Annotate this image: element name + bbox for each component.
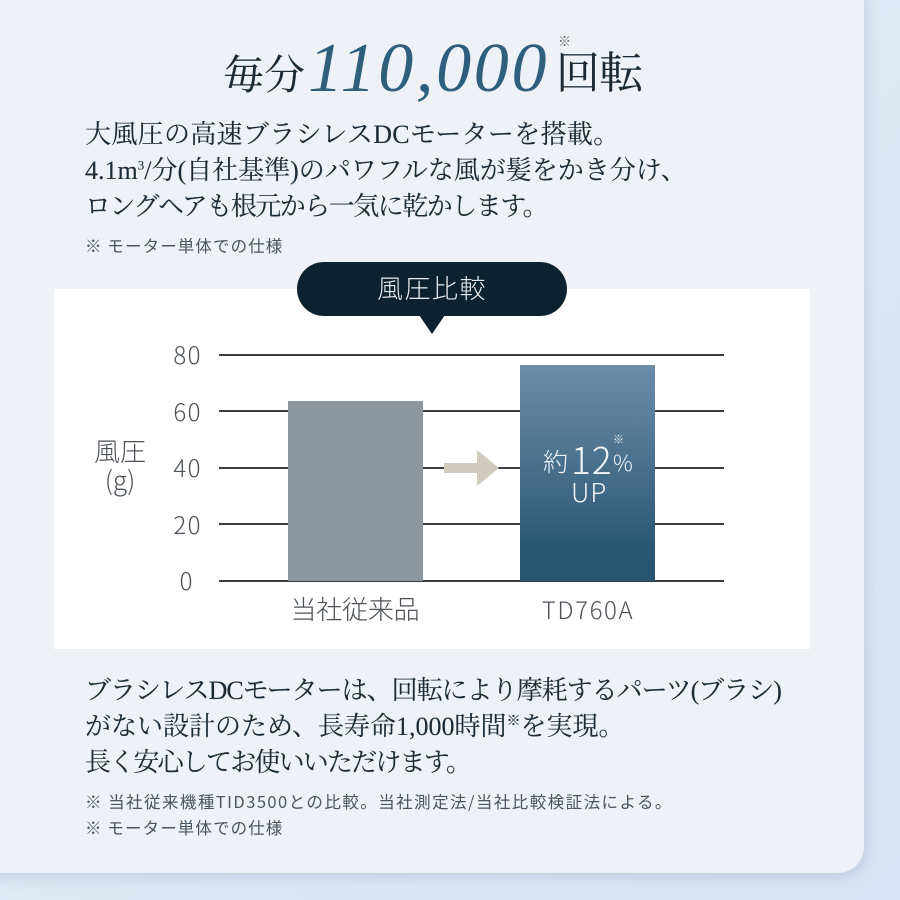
callout: about 12% up: 約: [543, 443, 568, 479]
arrow: [444, 450, 499, 486]
bar: TD760A: [520, 365, 655, 581]
heading: wind pressure comparison: [297, 262, 567, 334]
y axis labels: [173, 336, 202, 597]
text block: brushless motor: [85, 676, 781, 777]
panel: chart: [54, 289, 810, 649]
x label: TD760A: TD760A: [542, 591, 634, 626]
y axis labels: 20: [173, 506, 202, 541]
heading: wind pressure comparison: 風圧比較: [377, 269, 487, 306]
x label: previous product: 当社従来品: [290, 590, 420, 627]
y axis labels: 60: [173, 393, 202, 428]
footnotes: ※ モーター単体での仕様: [85, 815, 283, 839]
title: 毎分: [223, 52, 305, 98]
y axis labels: 0: [180, 562, 194, 597]
y axis title: (g): [105, 461, 135, 498]
text block: intro: [85, 120, 687, 221]
y axis title: 風圧: [94, 432, 146, 469]
callout: about 12% up: %: [613, 446, 633, 478]
callout: about 12% up: UP: [571, 473, 607, 510]
footnote: motor spec: ※ モーター単体での仕様: [85, 233, 283, 257]
y axis title: [94, 432, 146, 498]
text block: brushless motor: ブラシレスDCモーターは、回転により摩耗するパーツ(ブラシ): [85, 676, 781, 705]
bar chart: [94, 336, 724, 627]
title: [223, 30, 642, 107]
footnotes: ※ 当社従来機種TID3500との比較。当社測定法/当社比較検証法による。: [85, 789, 673, 813]
text block: brushless motor: がない設計のため、長寿命1,000時間※を実現。: [85, 712, 624, 741]
title: 110,000: [308, 30, 549, 107]
footnotes: [85, 789, 673, 839]
title: ※: [558, 34, 571, 49]
text block: intro: 大風圧の高速ブラシレスDCモーターを搭載。: [85, 120, 620, 149]
y axis labels: 80: [173, 336, 202, 371]
y axis labels: 40: [173, 449, 202, 484]
text block: intro: ロングヘアも根元から一気に乾かします。: [85, 192, 547, 221]
callout: about 12% up: ※: [613, 431, 624, 447]
title: 回転: [556, 49, 642, 98]
callout: about 12% up: [543, 431, 633, 510]
bar: previous product: [288, 401, 423, 581]
text block: intro: 4.1m3/分(自社基準)のパワフルな風が髪をかき分け、: [85, 156, 687, 185]
text block: brushless motor: 長く安心してお使いいただけます。: [85, 748, 470, 777]
callout: about 12% up: 12: [571, 431, 613, 485]
